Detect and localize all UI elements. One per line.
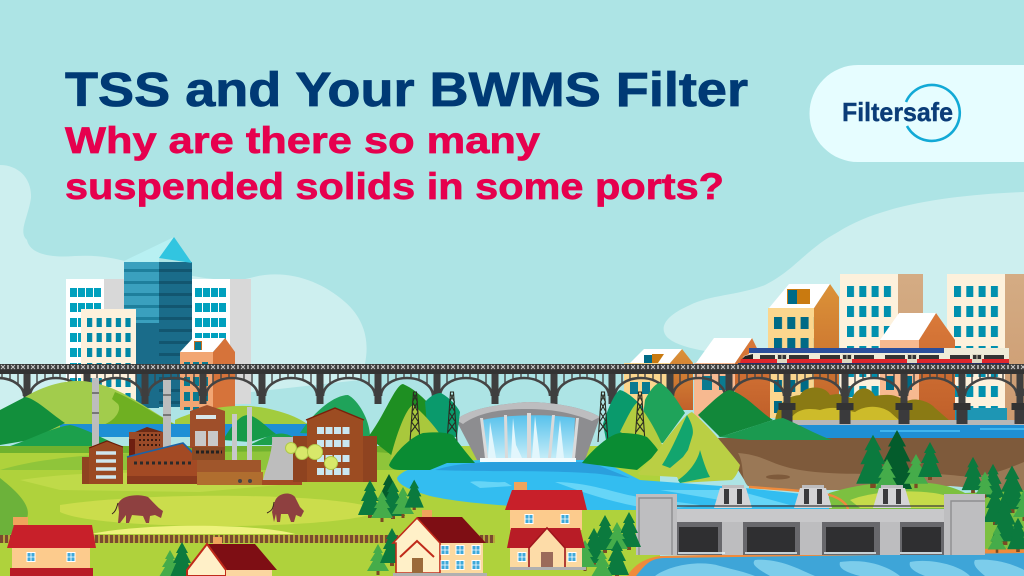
bridge and viaduct [0, 348, 1024, 424]
yellow green hill left [390, 405, 441, 460]
pylon left A [410, 392, 420, 442]
left skyline buildings [66, 237, 251, 410]
logo wordmark: Filtersafe [842, 97, 953, 127]
heading: subtitle line one: Why are there so many [65, 120, 540, 161]
peach apartment [880, 313, 955, 420]
back green hill [300, 395, 370, 437]
pylon left B [447, 392, 457, 442]
dam piers [480, 413, 579, 458]
pine trees lower middle [159, 512, 641, 576]
dark green hill left [368, 384, 430, 458]
back meadow hill [175, 406, 310, 432]
low green hill [718, 418, 832, 440]
dam [456, 402, 600, 462]
pine trees left cluster [358, 474, 424, 522]
pylon right A [598, 392, 608, 442]
rear brown building [129, 427, 163, 459]
cow one [112, 495, 163, 523]
dam wall [456, 402, 600, 460]
left river [60, 424, 310, 437]
gate bays [677, 522, 944, 555]
gate right tower [944, 494, 985, 555]
small hill near tower [250, 434, 302, 445]
heading: subtitle line two: suspended solids in some ports? [65, 166, 724, 207]
green hill front left [389, 432, 475, 470]
light green hill [25, 381, 177, 445]
train on bridge [738, 348, 1009, 365]
sluice gate structure [636, 485, 985, 555]
small peach block [694, 338, 770, 418]
gate left tower [636, 494, 677, 555]
cloud: right pale cloud [664, 192, 1024, 365]
logo panel: Filtersafe [810, 65, 1024, 162]
tall chimneys [92, 378, 252, 462]
factory base blocks [197, 460, 263, 485]
logo ring [906, 85, 960, 141]
olive bushes behind the bridge [775, 388, 950, 421]
railing [677, 505, 944, 507]
right river strip [780, 420, 1024, 439]
gate foam [678, 552, 942, 554]
meadow highlight [850, 491, 950, 508]
teal hill right [603, 390, 643, 440]
small hill behind factory [223, 415, 276, 442]
green hill front right [582, 433, 660, 470]
hill shadow patch [100, 392, 177, 426]
house one: bottom left [7, 517, 96, 576]
brown riverbank [718, 438, 1024, 492]
right skyline buildings [624, 274, 1024, 420]
central factory tower [190, 405, 225, 460]
cooling tower [263, 437, 293, 480]
spillway white streaks [488, 416, 564, 458]
gate lower wall [677, 522, 944, 555]
dam water spillway [482, 415, 575, 458]
yellow green hill right [620, 403, 665, 452]
river bank orange stripe [749, 487, 848, 510]
factory ground strip [262, 480, 302, 485]
house two: bottom centre [187, 537, 277, 576]
blue glass tower [124, 237, 192, 408]
back hills and left river [0, 381, 310, 447]
long sloped factory hall [127, 443, 197, 484]
gate deck [677, 509, 944, 522]
yellow apartment [768, 284, 839, 418]
railway track [0, 535, 495, 543]
house three: track side [393, 510, 487, 576]
dark hill right [640, 383, 685, 443]
heading: main title: TSS and Your BWMS Filter [65, 64, 748, 117]
right brick building [293, 408, 377, 482]
cream tower B [947, 274, 1024, 420]
small yellow house block [624, 349, 693, 410]
white office building left [66, 279, 127, 408]
cloud: left pale cloud [0, 165, 367, 420]
bridge beam [0, 370, 1024, 374]
big green hill left [0, 397, 65, 445]
logo pill background [810, 65, 1024, 162]
small green hill left [7, 425, 123, 447]
pediments [714, 485, 911, 508]
yellow green trees [286, 442, 338, 470]
spillway foam [480, 458, 576, 462]
dark green hill far right [698, 390, 773, 437]
title [65, 64, 748, 207]
bridge lattice deck [0, 364, 1024, 370]
teal hill left [425, 393, 460, 437]
pine trees right cluster [856, 430, 1024, 553]
cream tower A [840, 274, 923, 420]
mound green streaks [662, 415, 710, 483]
gate openings [679, 527, 941, 552]
central river [397, 460, 850, 510]
yellow green mound [638, 412, 740, 483]
house four: two storey by river [505, 482, 587, 570]
cream apartment block [81, 309, 136, 404]
orange apartment block [180, 338, 235, 410]
bridge arches and piers [0, 373, 1024, 424]
gate ground right green [829, 482, 1024, 556]
hills around dam [300, 383, 832, 483]
pylon right B [635, 392, 645, 442]
factory complex [82, 378, 377, 485]
bottom water [627, 548, 1024, 576]
dam parapet [456, 402, 600, 424]
white office building right [191, 279, 251, 404]
cow two [267, 494, 304, 522]
left small factory block [82, 441, 123, 484]
foreground ground [0, 446, 660, 576]
